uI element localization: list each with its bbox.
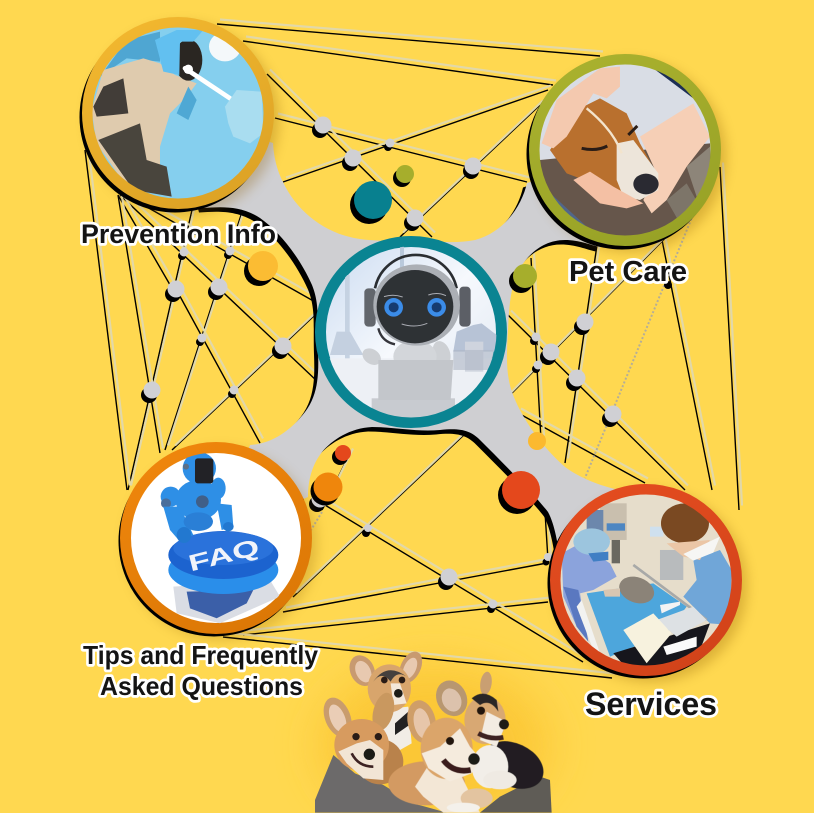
circle panel: services photo	[548, 488, 747, 682]
label: Services: Services	[585, 686, 717, 722]
text: FAQ: FAQ	[186, 534, 262, 576]
decorative dot: red small	[332, 445, 351, 465]
circle panel: prevention photo	[80, 22, 279, 215]
photo: dog swab test	[92, 28, 264, 198]
circle panel: pet care photo	[526, 58, 726, 252]
dog bed front	[315, 755, 447, 813]
dog bed back	[480, 777, 552, 813]
decorative dot: teal	[350, 181, 392, 224]
back dog	[350, 652, 422, 750]
grey connecting hub shape	[178, 113, 646, 580]
left dog	[318, 690, 403, 784]
circle panel: FAQ robot	[118, 446, 317, 640]
network nodes	[141, 116, 672, 613]
circle panel: centre robot	[320, 242, 502, 422]
photo: veterinary surgery	[557, 493, 737, 670]
middle dog	[388, 698, 493, 813]
decorative dot: orange	[310, 472, 342, 506]
label: Tips and Frequently Asked Questions: Asked Questions	[100, 671, 303, 701]
decorative dot: red big	[498, 471, 540, 514]
illustration: blue robot pressing FAQ button	[161, 452, 280, 623]
label: Prevention Info: Prevention Info	[81, 219, 276, 249]
decorative dot: yellow	[244, 251, 278, 286]
network lines	[85, 20, 742, 678]
decorative dot: amber	[528, 432, 546, 450]
label: Tips and Frequently Asked Questions: Tips and Frequently	[83, 640, 319, 670]
illustration: corgi dogs in a bed	[315, 648, 552, 813]
decorative dot: olive small	[393, 165, 414, 187]
hub shadow	[174, 118, 642, 584]
background glow behind dogs	[320, 665, 550, 813]
photo: dog being stroked	[540, 64, 710, 236]
label: Tips and Frequently Asked Questions	[83, 640, 319, 701]
illustration: chatbot with headset and laptop	[328, 245, 497, 418]
label: Pet Care: Pet Care	[569, 256, 687, 288]
right dog	[430, 671, 551, 798]
decorative dot: olive	[509, 264, 537, 293]
